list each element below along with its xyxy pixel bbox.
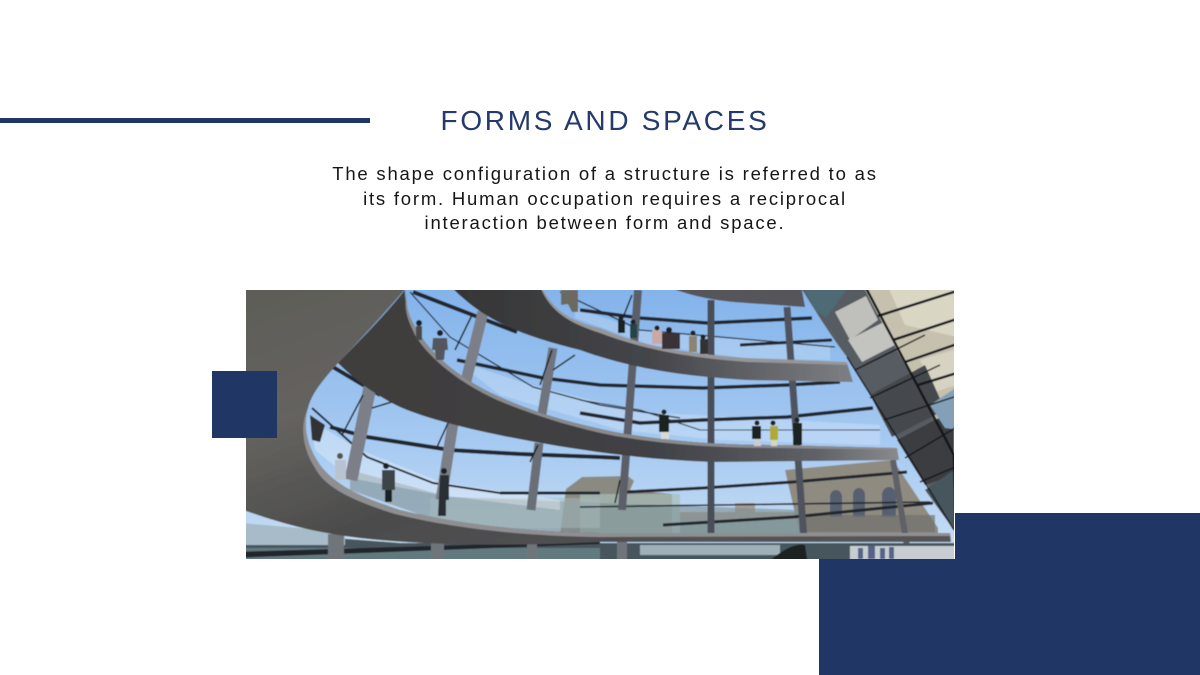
window frame bands	[312, 292, 933, 525]
glass balustrades	[350, 470, 800, 535]
upper-left group	[416, 320, 448, 360]
top landing person	[561, 290, 578, 312]
description text: interaction between form and space.	[425, 212, 785, 233]
pillars	[351, 290, 910, 565]
description text	[332, 163, 878, 233]
third ramp	[445, 280, 853, 382]
lower ramp and left wall	[230, 280, 951, 545]
title: FORMS AND SPACES	[441, 105, 769, 136]
building left	[560, 476, 672, 535]
fourth ramp	[650, 280, 805, 307]
second ramp	[338, 290, 899, 462]
header rule	[0, 118, 370, 123]
upper group	[618, 316, 708, 354]
description text: The shape configuration of a structure is referred to as	[332, 163, 878, 184]
people	[310, 290, 802, 516]
description text: its form. Human occupation requires a reciprocal	[363, 188, 847, 208]
bottom floor band	[230, 530, 970, 570]
sky	[230, 280, 970, 575]
decorative block: bottom right	[819, 513, 1200, 675]
decorative square	[212, 371, 277, 438]
dome roof	[796, 280, 970, 555]
middle walkway people	[659, 410, 802, 446]
photo: spiral ramps inside a glass dome	[246, 290, 954, 559]
building right	[785, 460, 938, 535]
thin diagonal struts	[342, 295, 632, 503]
distant city	[680, 503, 800, 535]
lower-left people	[310, 415, 449, 516]
